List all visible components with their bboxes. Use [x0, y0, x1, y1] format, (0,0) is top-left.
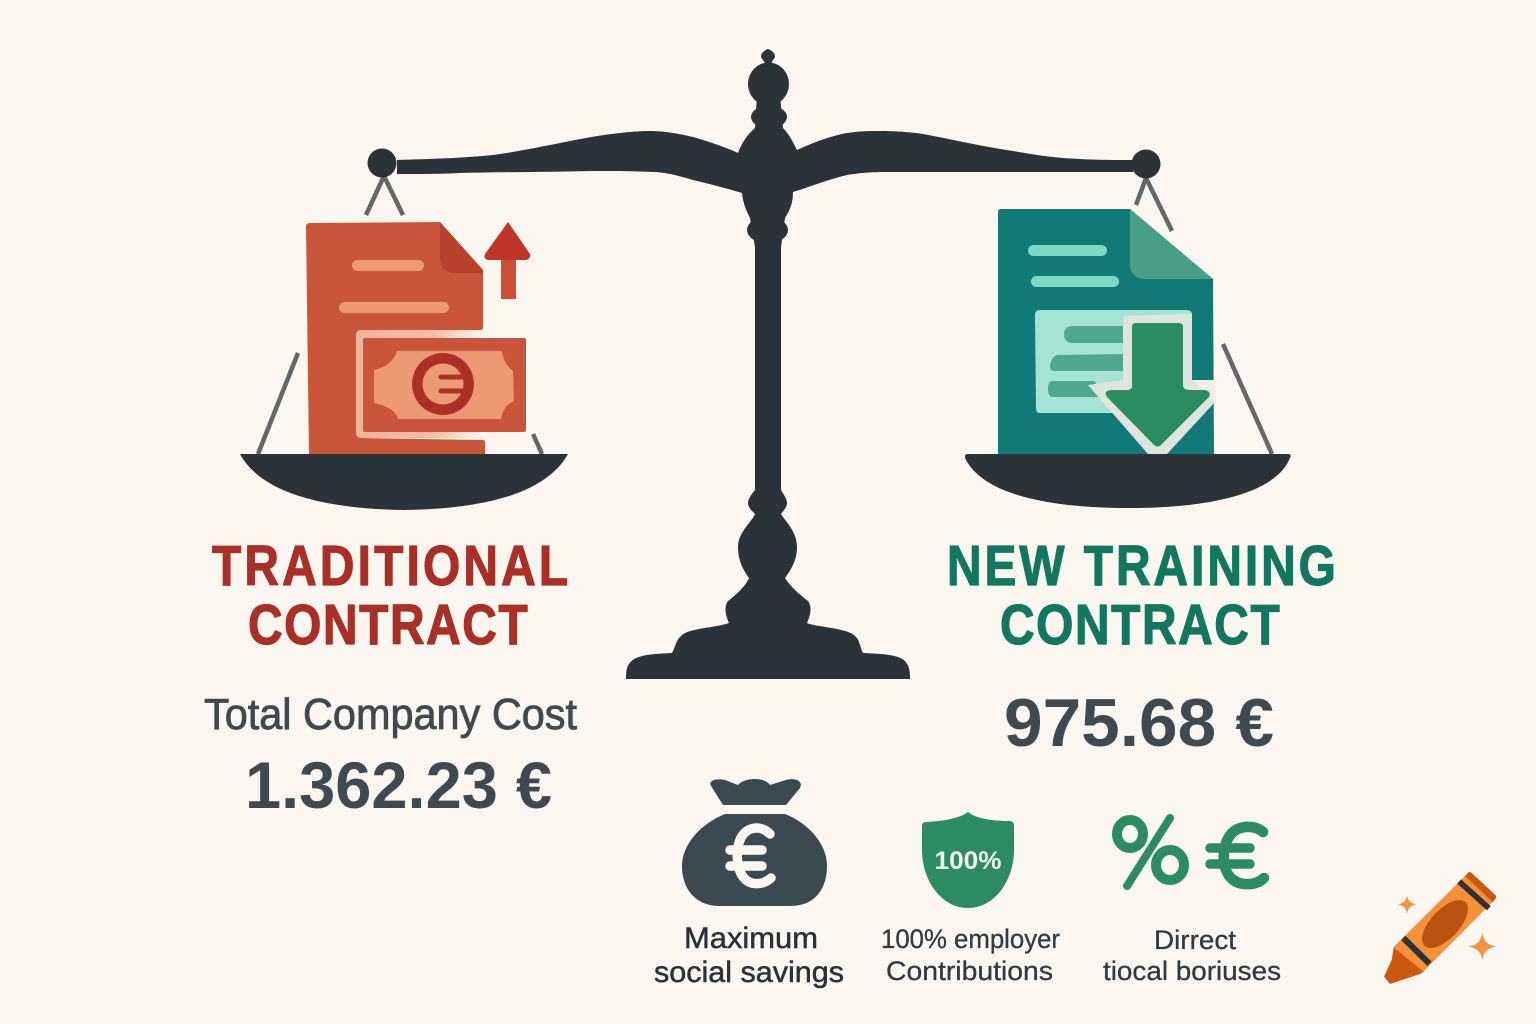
label: maximum social savings: Maximum	[684, 922, 818, 955]
label: employer contributions: 100% employer	[881, 924, 1060, 954]
icon: traditional contract document with banknote	[306, 222, 526, 454]
icon: new training contract document with down arrow	[998, 209, 1215, 454]
label: maximum social savings: social savings	[654, 956, 844, 989]
icon: money bag	[682, 779, 827, 906]
label: maximum social savings	[654, 922, 844, 989]
heading: traditional contract: CONTRACT	[248, 593, 528, 657]
icon: percent and euro	[1117, 818, 1264, 886]
label: employer contributions: Contributions	[886, 956, 1053, 986]
heading: new training contract: CONTRACT	[1000, 593, 1280, 657]
label: direct fiscal bonuses: Dirrect	[1154, 925, 1237, 955]
heading: traditional contract	[212, 534, 568, 657]
icon: crayon with sparkles	[1384, 872, 1496, 984]
text: total company cost label: Total Company Cost	[204, 690, 577, 739]
number: traditional cost: 1.362.23 €	[245, 748, 552, 822]
heading: new training contract: NEW TRAINING	[947, 534, 1336, 598]
label: direct fiscal bonuses: tiocal boriuses	[1103, 956, 1281, 986]
icon: cost up arrow	[484, 222, 530, 299]
icon: 100% shield: 100%	[934, 847, 1002, 875]
balance scale strings	[258, 176, 1272, 454]
label: employer contributions	[881, 924, 1060, 986]
right scale pan	[965, 454, 1291, 508]
label: direct fiscal bonuses	[1103, 925, 1281, 986]
balance scale stand and beam	[368, 49, 1160, 679]
heading: traditional contract: TRADITIONAL	[212, 534, 568, 598]
number: new contract cost: 975.68 €	[1004, 685, 1274, 761]
left scale pan	[240, 454, 568, 510]
heading: new training contract	[947, 534, 1336, 657]
icon: 100% shield	[922, 812, 1014, 908]
